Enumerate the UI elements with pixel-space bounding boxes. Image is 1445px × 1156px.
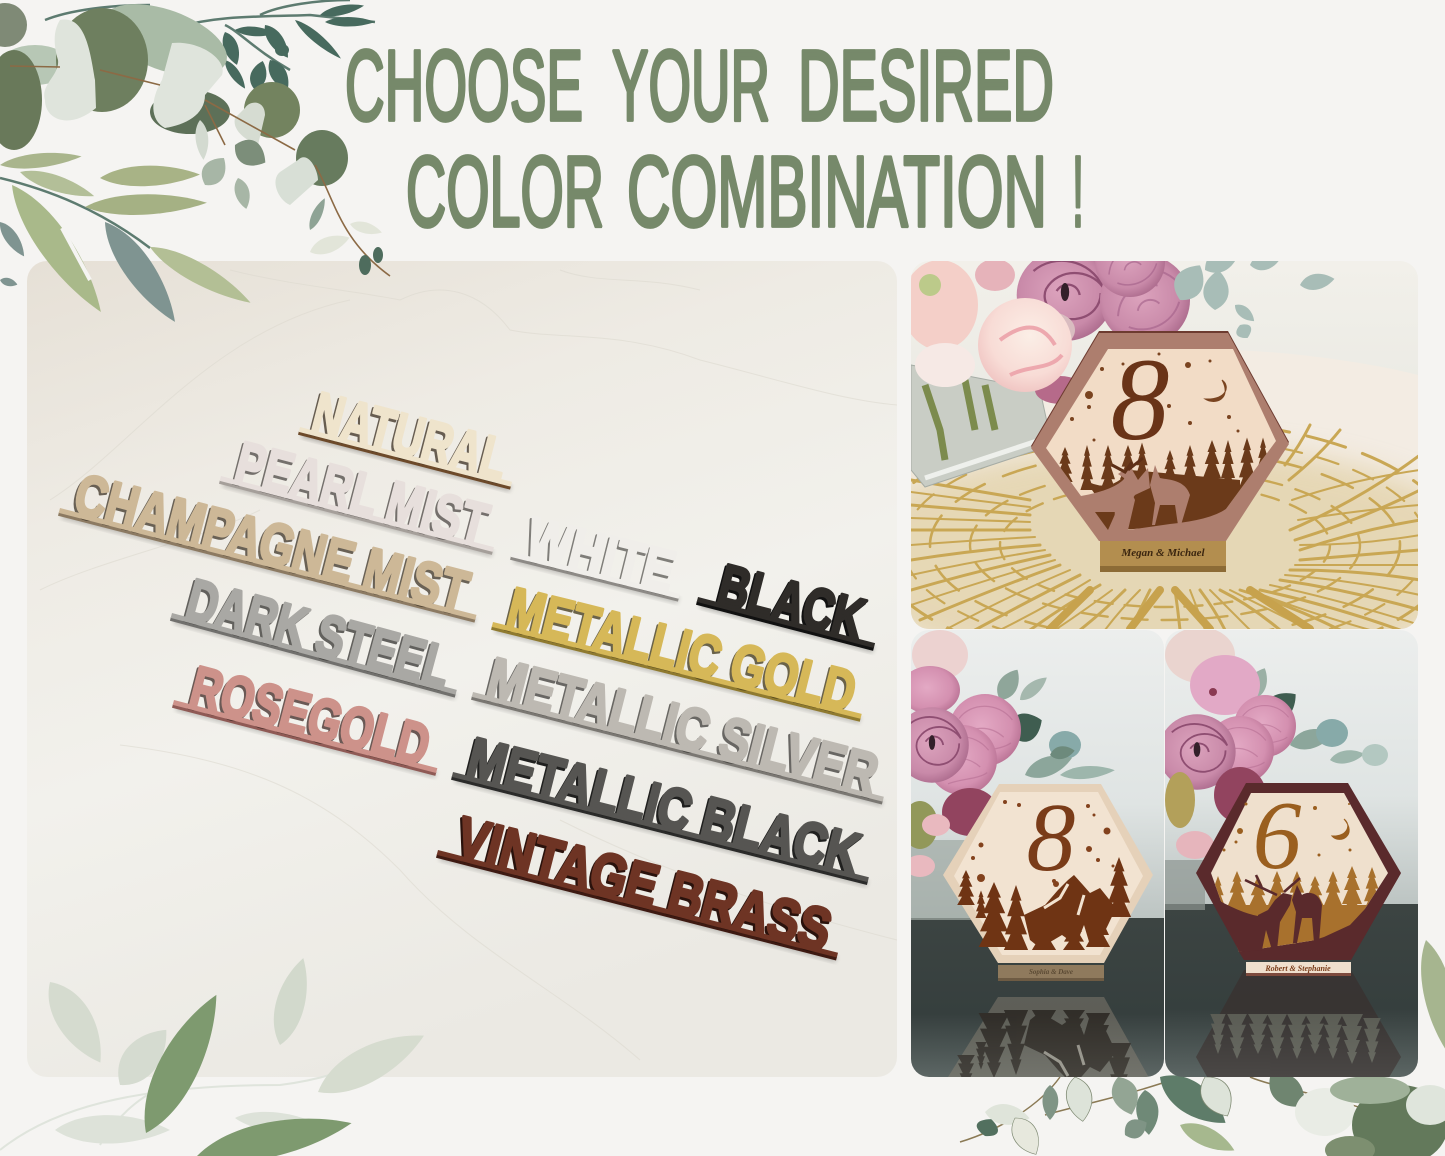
flowers — [1158, 627, 1388, 859]
title line 2: COLOR — [406, 136, 604, 248]
sample: White: WHITE — [520, 505, 682, 605]
sample: Pearl Mist: PEARL MIST — [229, 430, 495, 558]
sample: Metallic Black — [451, 736, 870, 888]
title — [345, 30, 1084, 248]
sprig — [0, 0, 375, 248]
infographic canvas: ! — [1072, 136, 1084, 248]
stars — [971, 800, 1114, 887]
sample: Pearl Mist — [219, 440, 494, 558]
title line 1 — [345, 30, 1054, 142]
title line 2: COMBINATION — [627, 136, 1047, 248]
name plate — [998, 965, 1104, 981]
stars — [1222, 802, 1352, 856]
sample: Metallic Gold: METALLIC GOLD — [501, 575, 862, 725]
decoration: watercolour leaves top left — [0, 0, 390, 330]
sample: Champagne Mist: CHAMPAGNE MIST — [66, 464, 473, 627]
sample: Black — [696, 563, 876, 654]
title line 1: DESIRED — [798, 30, 1054, 142]
decoration: translucent leaves bottom left — [0, 954, 432, 1156]
hexagon sign — [943, 784, 1153, 963]
sample: White: WHITE — [518, 508, 679, 607]
table number 6: 6 — [1252, 782, 1302, 890]
gold placemat — [911, 423, 1418, 629]
sample: Black: BLACK — [712, 552, 872, 652]
sample: Natural — [298, 391, 513, 493]
eucalyptus leaves — [56, 8, 148, 112]
large green leaf behind — [94, 0, 236, 90]
sample: Metallic Black: METALLIC BLACK — [461, 726, 867, 887]
hexagon sign — [1196, 782, 1401, 960]
sample: White — [510, 518, 680, 605]
sample: Champagne Mist — [58, 474, 477, 626]
sample: Dark Steel — [170, 578, 458, 700]
lower frame with deer — [1239, 873, 1401, 960]
glass vase — [911, 365, 1052, 487]
sample: Champagne Mist: CHAMPAGNE MIST — [68, 462, 476, 625]
sample: Metallic Silver — [471, 656, 884, 808]
table number 8: 8 — [1026, 784, 1076, 892]
sample: Black: BLACK — [710, 555, 869, 655]
sample: Rosegold: ROSEGOLD — [184, 654, 437, 778]
name plate: Megan & Michael — [1120, 547, 1205, 559]
name plate — [1246, 962, 1351, 976]
moon — [1205, 380, 1226, 402]
sample: Pearl Mist: PEARL MIST — [227, 432, 493, 560]
sample: Natural: NATURAL — [304, 382, 512, 495]
hexagon frame — [1031, 331, 1289, 541]
forest — [1210, 866, 1390, 955]
sample: Rosegold — [172, 665, 438, 779]
panel: marble photo with colour samples — [27, 261, 897, 1077]
olive leaves — [0, 149, 82, 172]
forest and mountains — [957, 857, 1131, 950]
sample: Metallic Gold — [491, 586, 862, 725]
title line 1: YOUR — [612, 30, 770, 142]
moon — [1332, 819, 1349, 839]
forest scene — [1057, 438, 1270, 530]
stars — [1070, 352, 1240, 442]
lower hexagon frame with deer — [1081, 478, 1226, 541]
name plate — [1100, 541, 1226, 572]
sample: Vintage Brass: VINTAGE BRASS — [450, 805, 838, 963]
reflection — [948, 997, 1148, 1077]
name plate: Sophia & Dave — [1029, 968, 1073, 976]
sample: Dark Steel: DARK STEEL — [180, 567, 458, 700]
photo: rose gold hexagon table number on gold placemat — [911, 261, 1418, 629]
stag and doe — [1115, 465, 1190, 528]
reflection — [1196, 970, 1401, 1077]
marble veins — [40, 270, 897, 1060]
sample: Vintage Brass: VINTAGE BRASS — [448, 807, 836, 965]
sample: Metallic Silver: METALLIC SILVER — [481, 646, 885, 807]
photo: dark hexagon with deer — [1165, 630, 1418, 1077]
sample: Rosegold: ROSEGOLD — [182, 656, 434, 780]
sample: Metallic Silver: METALLIC SILVER — [479, 648, 883, 810]
eucalyptus — [1174, 261, 1334, 338]
title line 2 — [406, 136, 1084, 248]
flowers — [911, 261, 1334, 404]
table number 8: 8 — [1110, 334, 1170, 465]
sample: Dark Steel: DARK STEEL — [178, 569, 455, 702]
sample: Natural: NATURAL — [306, 380, 514, 493]
title line 1: CHOOSE — [345, 30, 583, 142]
flowers — [895, 630, 1115, 877]
sample: Vintage Brass — [436, 814, 838, 964]
sample: Metallic Black: METALLIC BLACK — [459, 728, 865, 889]
sample: Metallic Gold: METALLIC GOLD — [499, 578, 860, 727]
photo: natural hexagon with mountains — [911, 630, 1164, 1077]
pink hellebore — [911, 261, 978, 348]
name plate: Robert & Stephanie — [1264, 964, 1331, 973]
decoration: eucalyptus sprig bottom right — [960, 937, 1445, 1156]
